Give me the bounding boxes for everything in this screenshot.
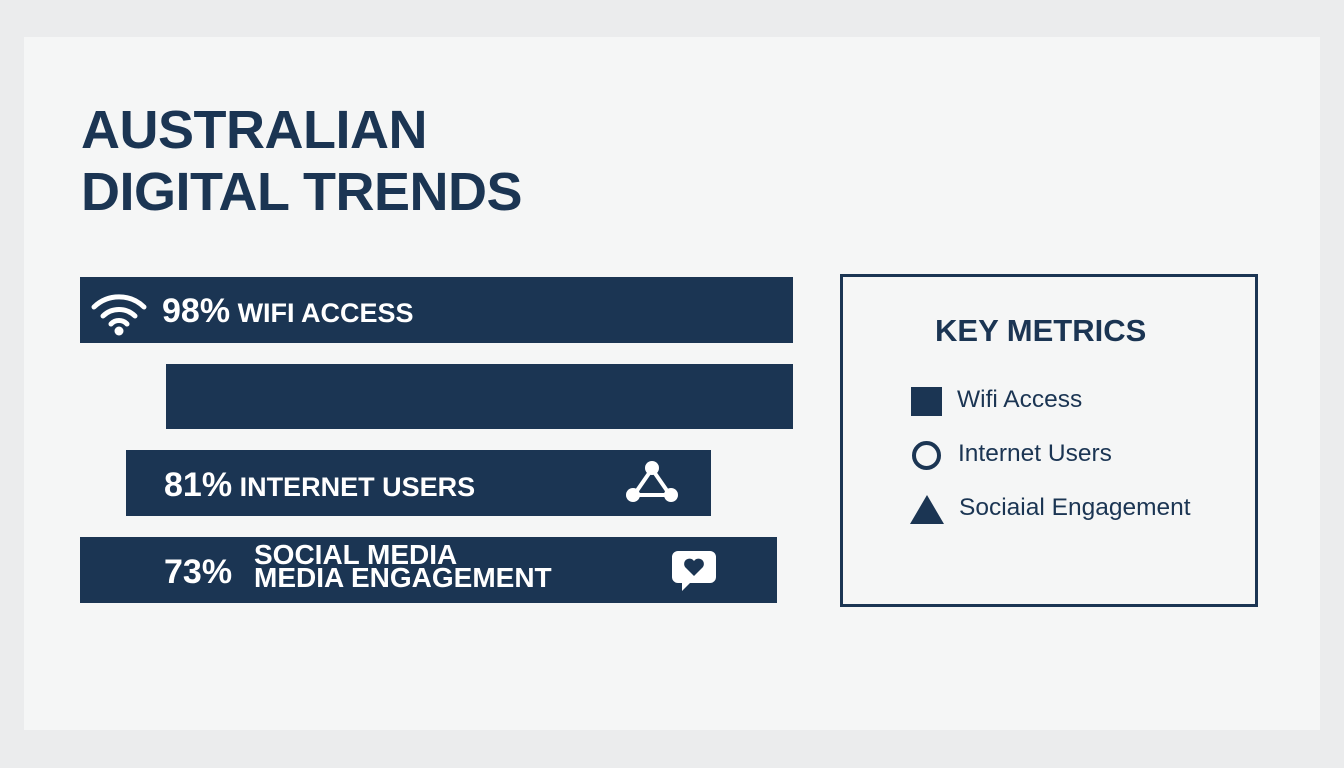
- bar: social media: SOCIAL MEDIA: [254, 539, 457, 570]
- legend item: internet: Internet Users: [958, 440, 1112, 467]
- legend item: social: Sociaial Engagement: [959, 494, 1191, 521]
- bar: social media: MEDIA ENGAGEMENT: [254, 562, 552, 593]
- title: AUSTRALIAN: [81, 100, 427, 160]
- label: 81% INTERNET USERS: [164, 466, 475, 504]
- legend box: [840, 274, 1258, 607]
- icon: wifi: [92, 294, 146, 336]
- icon: chat heart: [672, 551, 716, 591]
- label: 98% WIFI ACCESS: [162, 292, 414, 330]
- legend title: KEY METRICS: [935, 313, 1146, 348]
- bar: internet users: [126, 450, 711, 516]
- bar: social media: [80, 537, 777, 603]
- bar: empty: [166, 364, 793, 429]
- icon: network triangle: [626, 461, 678, 502]
- legend item: wifi: [911, 386, 1082, 416]
- bar: wifi access: [80, 277, 793, 343]
- title: [81, 100, 522, 222]
- legend item: internet: [912, 440, 1112, 470]
- title: DIGITAL TRENDS: [81, 162, 522, 222]
- label: 73%: [164, 553, 232, 591]
- legend item: wifi: Wifi Access: [957, 386, 1082, 413]
